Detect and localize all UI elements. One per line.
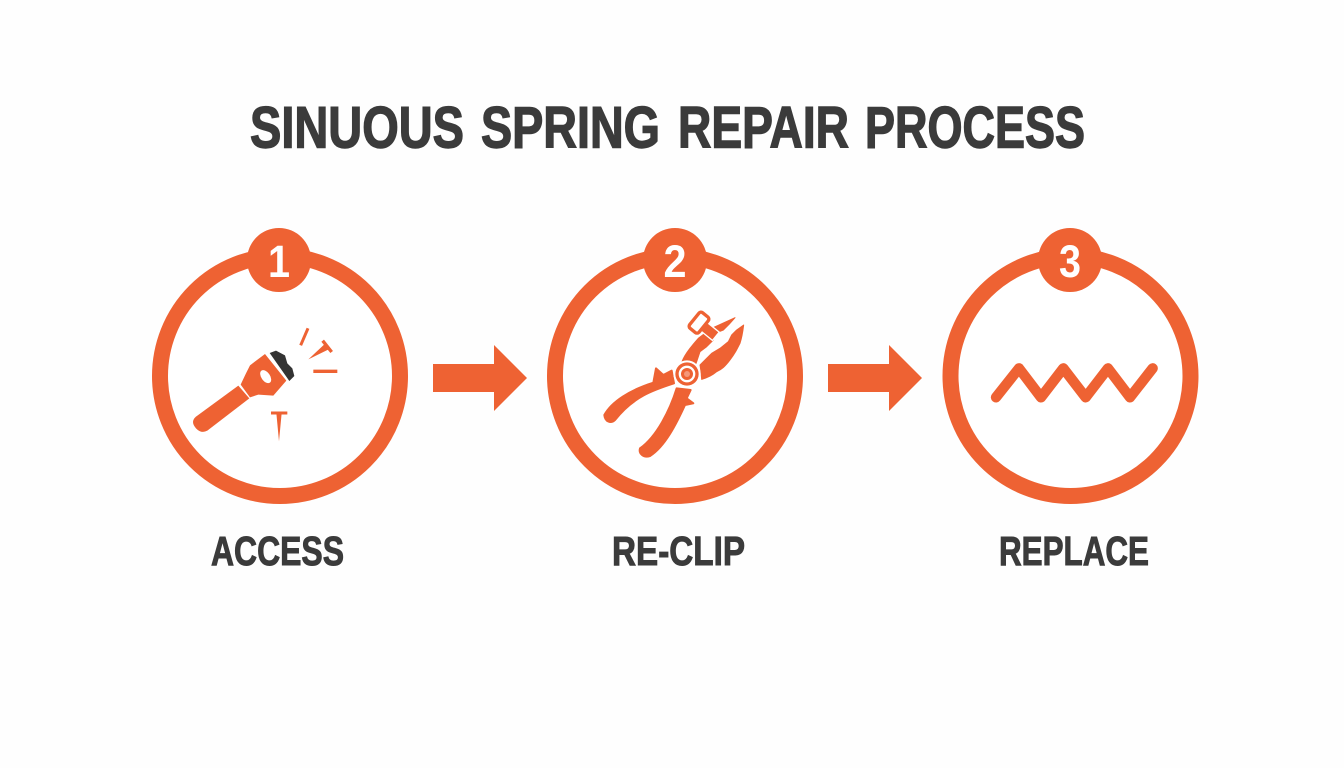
label: re-clip: RE-CLIP: [612, 528, 745, 574]
step 2 number badge: 2: [664, 236, 686, 287]
step 3 ring: [950, 256, 1190, 496]
title: SINUOUS: [250, 96, 464, 160]
step 3 number badge: [1038, 228, 1102, 292]
step 2: re-clip: [555, 228, 795, 496]
title: SPRING: [481, 96, 660, 160]
step 3: replace: [950, 228, 1190, 496]
title: PROCESS: [865, 96, 1085, 160]
step 1: access: [160, 228, 400, 496]
label: access: ACCESS: [211, 528, 344, 574]
title: [250, 96, 1085, 160]
step 1 ring: [160, 256, 400, 496]
icon: sinuous spring: [996, 368, 1153, 397]
arrow: step 1 to step 2: [433, 345, 527, 411]
step 2 ring: [555, 256, 795, 496]
icon: flashlight with nails: [193, 328, 337, 441]
step 1 number badge: [247, 228, 311, 292]
arrow: step 2 to step 3: [828, 345, 922, 411]
step 1 number badge: 1: [268, 236, 290, 287]
title: REPAIR: [678, 96, 849, 160]
step 2 number badge: [643, 228, 707, 292]
label: replace: REPLACE: [999, 528, 1149, 574]
icon: pliers with clip: [604, 311, 744, 457]
step 3 number badge: 3: [1059, 236, 1081, 287]
